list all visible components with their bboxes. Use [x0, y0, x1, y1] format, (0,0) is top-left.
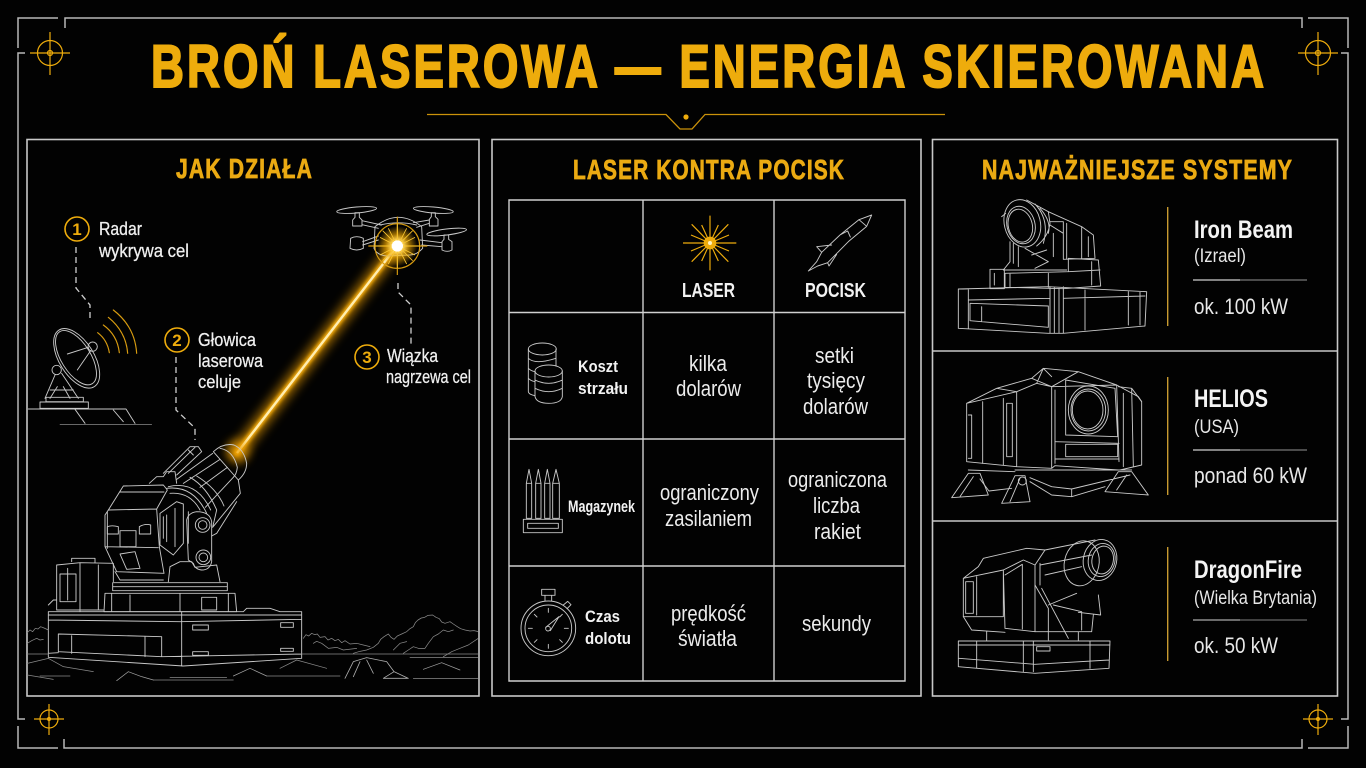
cell: laser cost: kilka: [689, 351, 728, 376]
panel: laser kontra pocisk: [492, 140, 921, 696]
system text: helios: ponad 60 kW: [1194, 463, 1307, 488]
base: [48, 608, 302, 666]
laser turret: [27, 445, 478, 681]
crosshair top left: [30, 32, 70, 75]
system text: helios: (USA): [1194, 417, 1239, 438]
row label: koszt strzału: strzału: [578, 379, 628, 398]
cell: missile cost: tysięcy: [807, 368, 865, 393]
title underline ornament: [427, 114, 945, 129]
panel: najważniejsze systemy: [932, 140, 1338, 696]
step 2 label: celuje: [198, 372, 241, 392]
crosshair bottom right: [1303, 704, 1333, 735]
row label: magazynek: Magazynek: [568, 497, 635, 516]
comparison table grid: [509, 200, 905, 681]
radar waves: [98, 310, 137, 353]
system: iron beam: [958, 196, 1307, 333]
icon: ammunition magazine: [523, 469, 562, 533]
trunnion arm: [187, 512, 212, 570]
illustration: helios: [952, 368, 1148, 503]
icon: laser burst: [683, 216, 736, 270]
column label: laser: LASER: [682, 280, 735, 302]
cell: laser flight time: prędkość: [671, 601, 746, 626]
row label: czas dolotu: [585, 607, 631, 648]
system: dragonfire: [958, 536, 1317, 673]
system text: iron beam: Iron Beam: [1194, 216, 1293, 244]
step 3 label: 3: [362, 348, 372, 367]
icon: radar dish: [28, 310, 152, 424]
crosshair top right: [1298, 32, 1338, 75]
column label: pocisk: POCISK: [805, 280, 866, 302]
row label: koszt strzału: Koszt: [578, 357, 618, 376]
system text: dragonfire: [1193, 556, 1317, 658]
row label: koszt strzału: [578, 357, 628, 398]
impact flare: [374, 223, 420, 268]
crosshair bottom left: [34, 704, 64, 735]
cell: missile flight time: sekundy: [802, 611, 871, 636]
cell: laser cost: [676, 351, 741, 401]
landscape: [27, 627, 370, 650]
step 2 label: [165, 328, 264, 440]
icon: stopwatch: [521, 589, 576, 656]
step 3 label: nagrzewa cel: [386, 367, 471, 387]
row label: czas dolotu: dolotu: [585, 629, 631, 648]
system: helios: [952, 368, 1307, 503]
illustration: iron beam: [958, 196, 1147, 333]
cell: missile magazine: ograniczona: [788, 467, 888, 492]
cell: laser magazine: ograniczony: [660, 480, 759, 505]
step 1 label: 1: [72, 220, 82, 239]
icon: drone target: [336, 205, 467, 275]
cell: laser magazine: [660, 480, 759, 531]
cell: laser magazine: zasilaniem: [665, 506, 752, 531]
side box: [48, 558, 113, 612]
turntable and pedestal: [104, 583, 237, 612]
system text: dragonfire: (Wielka Brytania): [1194, 588, 1317, 609]
step 1 label: wykrywa cel: [98, 241, 189, 261]
system text: iron beam: ok. 100 kW: [1194, 294, 1288, 319]
laser beam: [227, 246, 397, 462]
step 2 label: Głowica: [198, 330, 257, 350]
step 2 label: laserowa: [198, 351, 264, 371]
heading: jak działa: JAK DZIAŁA: [176, 153, 313, 184]
cell: missile magazine: liczba: [813, 493, 861, 518]
cell: laser cost: dolarów: [676, 376, 741, 401]
cell: laser flight time: [671, 601, 746, 651]
system text: iron beam: (Izrael): [1194, 246, 1246, 267]
system text: dragonfire: DragonFire: [1194, 556, 1302, 584]
icon: coins: [528, 343, 562, 403]
system text: iron beam: [1193, 216, 1307, 319]
step 3 label: Wiązka: [387, 346, 439, 366]
cell: missile cost: dolarów: [803, 394, 868, 419]
system text: helios: HELIOS: [1194, 385, 1268, 413]
cell: missile cost: setki: [815, 343, 854, 368]
row label: czas dolotu: Czas: [585, 607, 620, 626]
step 2 label: 2: [172, 331, 182, 350]
step 3 label: [355, 283, 471, 387]
illustration: dragonfire: [958, 536, 1121, 673]
system text: dragonfire: ok. 50 kW: [1194, 633, 1278, 658]
icon: missile: [808, 215, 872, 271]
step 1 label: [65, 217, 189, 320]
cell: missile magazine: [788, 467, 888, 544]
cell: laser flight time: światła: [678, 626, 738, 651]
panel: jak działa: [27, 140, 479, 696]
heading: laser kontra pocisk: LASER KONTRA POCISK: [573, 154, 845, 185]
target reticle: [368, 217, 427, 275]
system text: helios: [1193, 385, 1307, 488]
turret head: [105, 485, 167, 580]
barrel: [213, 445, 247, 480]
cell: missile magazine: rakiet: [814, 519, 861, 544]
step 1 label: Radar: [99, 219, 142, 239]
cell: missile cost: [803, 343, 868, 419]
